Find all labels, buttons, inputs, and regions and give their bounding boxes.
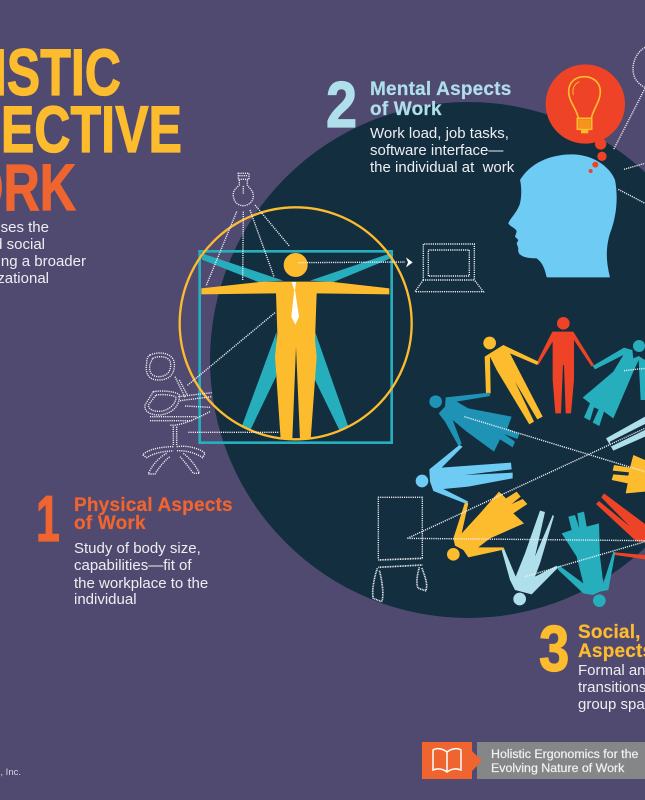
- vitruvian figure: [180, 207, 412, 443]
- panel: mental aspects of work: Work load, job tasks,: [370, 125, 509, 142]
- panel: social aspects of work: [539, 613, 645, 713]
- person: teal woman: [583, 340, 645, 426]
- dotted links across ring: [407, 368, 645, 577]
- person: yellow at right: [612, 455, 645, 493]
- book title: [491, 747, 638, 775]
- panel: physical aspects of work: capabilities—fit of: [74, 557, 192, 574]
- icon: light bulb: [569, 77, 600, 133]
- icon: laptop: [415, 244, 483, 292]
- person: red at right: [596, 493, 645, 559]
- dotted links at upper right: [613, 47, 645, 203]
- icon: open book: [422, 742, 482, 779]
- title: [0, 36, 182, 225]
- teal back limbs: [201, 254, 390, 430]
- book title: Evolving Nature of Work: [491, 761, 625, 775]
- circle frame: [180, 207, 412, 439]
- person: red man: [537, 317, 594, 413]
- thought bubble: [546, 64, 625, 173]
- person: pale at right: [606, 417, 645, 451]
- panel: physical aspects of work: individual: [74, 591, 137, 608]
- square frame: [200, 251, 392, 443]
- ring of people holding hands: [407, 317, 645, 607]
- person: pale blue man: [502, 511, 557, 605]
- chair: [143, 353, 212, 474]
- lamp beams: [206, 205, 289, 286]
- person: yellow man: [483, 337, 543, 424]
- panel: physical aspects of work: [36, 482, 233, 608]
- link: figure to laptop: [298, 260, 405, 265]
- callout: related book: [422, 742, 645, 779]
- panel: mental aspects of work: Mental Aspects: [370, 79, 511, 100]
- panel: mental aspects of work: of Work: [370, 99, 442, 120]
- panel: mental aspects of work: software interface—: [370, 142, 503, 159]
- panel: social aspects of work: Social,: [578, 622, 641, 643]
- intro text: [0, 219, 86, 287]
- head silhouette: [508, 154, 617, 277]
- panel: social aspects of work: 3: [539, 613, 569, 685]
- panel: physical aspects of work: of Work: [74, 513, 146, 534]
- lamp: [233, 173, 253, 206]
- dark central circle: [210, 102, 645, 618]
- panel: physical aspects of work: Physical Aspects: [74, 495, 233, 516]
- icon: flip chart: [373, 497, 427, 602]
- person: yellow woman: [447, 492, 527, 561]
- white tie: [291, 282, 299, 325]
- thinking head: [508, 47, 645, 277]
- panel: physical aspects of work: the workplace to the: [74, 575, 208, 592]
- gray label: [477, 742, 645, 779]
- yellow body: [201, 253, 389, 439]
- panel: mental aspects of work: [326, 68, 515, 176]
- arrowhead: [406, 257, 413, 267]
- person: light blue man: [416, 445, 513, 504]
- panel: physical aspects of work: 1: [36, 482, 60, 555]
- person: teal woman bottom: [557, 512, 615, 607]
- panel: mental aspects of work: the individual at work: [370, 159, 515, 176]
- dotted equipment: lamp, chair and links: [143, 173, 413, 474]
- link: figure to chair: [187, 313, 278, 432]
- panel: physical aspects of work: Study of body size,: [74, 540, 201, 557]
- book title: Holistic Ergonomics for the: [491, 747, 638, 761]
- person: blue woman: [429, 393, 519, 452]
- panel: mental aspects of work: 2: [326, 68, 357, 141]
